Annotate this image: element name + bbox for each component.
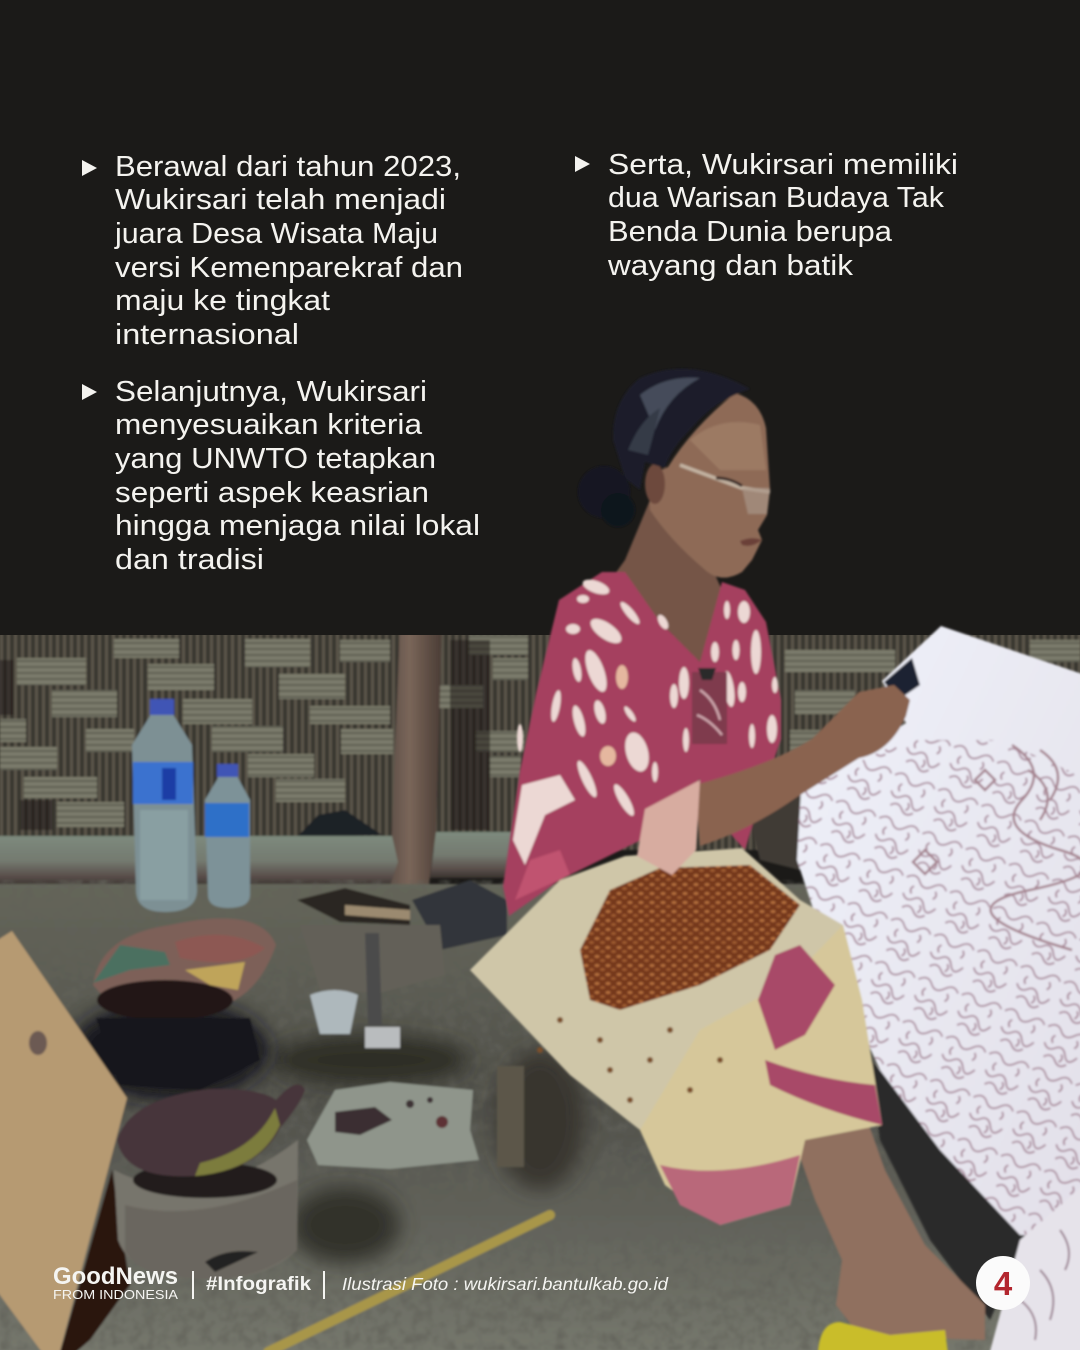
bullet lines: menyesuaikan kriteria xyxy=(115,409,423,441)
bullet lines: yang UNWTO tetapkan xyxy=(115,443,436,475)
woman: face xyxy=(645,393,770,578)
bullet lines: Wukirsari telah menjadi xyxy=(115,184,446,216)
ash pile, cup and tools xyxy=(297,880,524,1167)
wooden board xyxy=(0,931,127,1350)
bullet lines: wayang dan batik xyxy=(607,250,854,282)
logo: GoodNews: GoodNews xyxy=(53,1263,178,1290)
bullet text: Wukirsari juara Desa Wisata xyxy=(82,151,471,351)
bullet lines: versi Kemenparekraf dan xyxy=(115,252,463,284)
bamboo bench xyxy=(0,832,515,886)
hashtag: #Infografik xyxy=(206,1274,311,1295)
yellow sandal xyxy=(818,1322,950,1350)
bullet lines: dua Warisan Budaya Tak xyxy=(608,182,945,214)
footer credit bar xyxy=(53,1263,669,1302)
bullet lines: maju ke tingkat xyxy=(115,285,330,317)
batik cloth on frame xyxy=(797,626,1080,1350)
clay stove and pot xyxy=(114,1084,305,1279)
woman: sleeve cuff xyxy=(637,780,700,875)
bullet marker xyxy=(82,160,97,176)
woman: blouse xyxy=(503,572,781,916)
woman: forearm and hand xyxy=(695,685,910,846)
bullet lines: juara Desa Wisata Maju xyxy=(114,218,438,250)
bullet marker xyxy=(575,156,590,172)
bullet lines: hingga menjaga nilai lokal xyxy=(115,510,480,542)
bamboo pillar xyxy=(390,635,441,886)
dark background panel xyxy=(0,0,1080,636)
bullet text: Warisan Budaya xyxy=(575,149,966,282)
woman: leg and foot xyxy=(780,1100,985,1340)
bullet marker xyxy=(82,384,97,400)
bullet lines: Serta, Wukirsari memiliki xyxy=(608,149,958,181)
logo: GoodNews: FROM INDONESIA xyxy=(53,1288,179,1302)
page number badge: 4 xyxy=(994,1265,1013,1302)
woman: hair xyxy=(578,369,750,527)
bamboo canting stick xyxy=(268,1215,550,1350)
broken tile with dye scraps xyxy=(307,1082,479,1169)
page number badge xyxy=(976,1256,1030,1310)
bullet lines: internasional xyxy=(115,319,299,351)
water bottles xyxy=(132,699,250,912)
earthen floor xyxy=(0,884,1080,1350)
bullet lines: Selanjutnya, Wukirsari xyxy=(115,376,427,408)
bullet lines: Berawal dari tahun 2023, xyxy=(115,151,461,183)
bullet lines: Benda Dunia berupa xyxy=(608,216,893,248)
woven bamboo wall xyxy=(0,625,1080,850)
woman: neck xyxy=(612,500,722,662)
bullet lines: dan tradisi xyxy=(115,544,264,576)
woman and batik cloth foreground xyxy=(470,369,1080,1350)
photo background: batik workshop xyxy=(0,625,1080,1350)
logo: GoodNews xyxy=(53,1263,179,1302)
bullet lines: seperti aspek keasrian xyxy=(115,477,429,509)
woman: skirt and lap cloth xyxy=(470,848,882,1225)
photo credit: Ilustrasi Foto : wukirsari.bantulkab.go.id xyxy=(342,1274,669,1294)
wall shadow behind arm xyxy=(745,790,800,870)
upper wok on stove xyxy=(93,918,276,1090)
shadow under batik cloth xyxy=(870,1060,1030,1320)
bullet text: kriteria UNWTO xyxy=(82,376,488,576)
